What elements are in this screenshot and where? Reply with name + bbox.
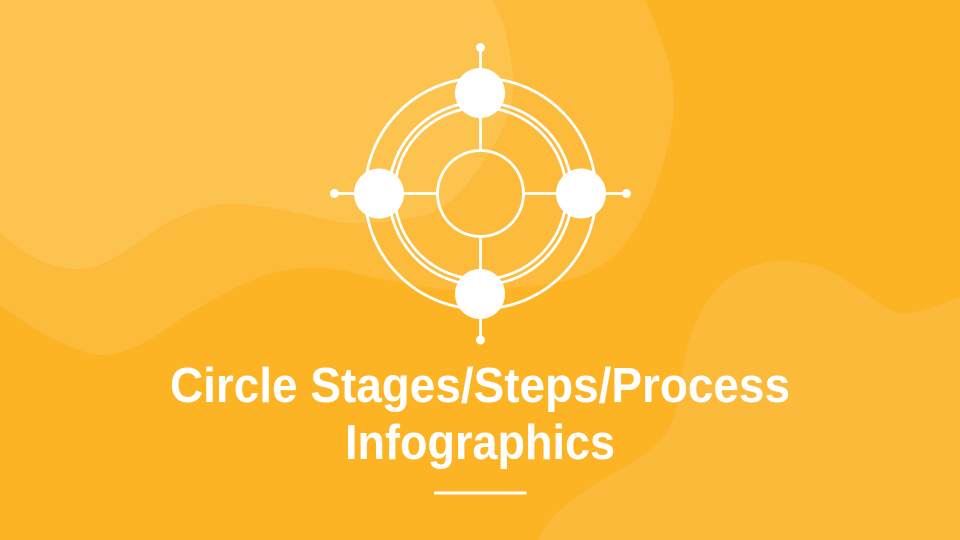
four stage nodes (354, 68, 606, 319)
icon: circle stages diagram (330, 43, 631, 344)
background blob: light tone top-left (0, 0, 513, 269)
connector lines (335, 48, 626, 340)
concentric rings (365, 78, 596, 309)
title: Circle Stages/Steps/Process (170, 359, 790, 413)
title: Infographics (345, 416, 615, 470)
background blob: bottom-right (538, 261, 960, 540)
title (170, 359, 790, 470)
background blob: middle tone top-left (0, 0, 674, 355)
four end dots (330, 43, 631, 344)
divider under title (434, 492, 526, 494)
